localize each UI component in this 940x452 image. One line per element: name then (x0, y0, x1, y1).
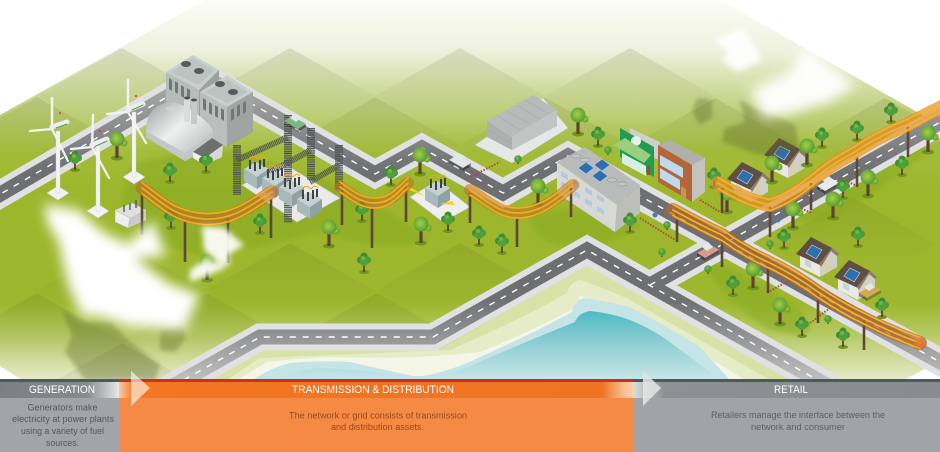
sea: deep water (267, 311, 720, 380)
power line: retail lower (673, 204, 925, 348)
trees (68, 102, 938, 349)
plant: chimneys (184, 96, 197, 124)
substation: pad (242, 163, 340, 222)
lattice towers (237, 115, 339, 223)
brick building (658, 140, 705, 202)
transmission heading: TRANSMISSION & DISTRIBUTION (292, 384, 454, 396)
clouds (44, 28, 856, 330)
road: sidewalks (0, 76, 940, 399)
transmission description: and distribution assets. (331, 422, 424, 432)
road: asphalt (0, 76, 940, 399)
generation description: using a variety of fuel (21, 426, 104, 436)
retail heading: RETAIL (774, 384, 808, 396)
beach: pale sand (227, 280, 770, 380)
turbine 3 (107, 80, 146, 184)
generation description: electricity at power plants (12, 414, 115, 424)
houses (727, 138, 877, 300)
retail description: network and consumer (751, 422, 845, 432)
road network (0, 76, 940, 399)
cloud: upper right large (750, 46, 856, 118)
arrow: generation to transmission (131, 371, 150, 406)
panel: generation (0, 379, 120, 452)
generation description (12, 402, 115, 448)
turbine 2 (71, 115, 109, 218)
beach: cream shoreline (237, 296, 745, 380)
bottom information band (0, 371, 940, 452)
beach and sea (205, 265, 800, 380)
shop (613, 128, 660, 177)
plant: front block (200, 75, 253, 147)
cloud: large left (44, 204, 200, 330)
generation heading: GENERATION (29, 384, 95, 396)
plant: annex box (193, 138, 223, 165)
white map corners (0, 360, 940, 380)
retail description: Retailers manage the interface between the (711, 410, 885, 420)
generator step-up transformer (115, 200, 146, 228)
panel: transmission and distribution (119, 379, 633, 452)
darker grass patches (120, 135, 930, 334)
transmission description: The network or grid consists of transmission (289, 410, 467, 420)
transmission line poles (142, 127, 908, 350)
power line: second span (340, 178, 408, 208)
plant: turbine hall (146, 102, 213, 161)
panel: retail (633, 379, 940, 452)
generation description: Generators make (28, 402, 98, 412)
power plant (146, 55, 253, 165)
beach: sand outer band (205, 265, 800, 380)
cloud shadows (62, 98, 800, 380)
vehicles (284, 114, 881, 301)
sea: shallow water (253, 298, 730, 380)
generation description: sources. (46, 438, 79, 448)
turbine 1 (30, 98, 69, 200)
power line: retail upper (718, 102, 940, 210)
warehouse (475, 95, 568, 163)
office building with solar panels (557, 147, 640, 232)
underground hedge lines (470, 162, 855, 323)
arrow: transmission to retail (643, 371, 661, 406)
road: centre dashes (0, 76, 940, 399)
cloud: upper right small (714, 28, 762, 72)
substation (237, 115, 340, 223)
power lines (142, 102, 940, 348)
transformers (244, 156, 322, 219)
wind turbines (30, 80, 146, 218)
power line: third span (470, 180, 573, 218)
transmission description (289, 410, 467, 432)
retail description (711, 410, 885, 432)
power line: generation span (142, 182, 272, 225)
plant: rear block (166, 55, 219, 132)
cloud: small left (190, 226, 244, 282)
second substation (409, 175, 470, 222)
